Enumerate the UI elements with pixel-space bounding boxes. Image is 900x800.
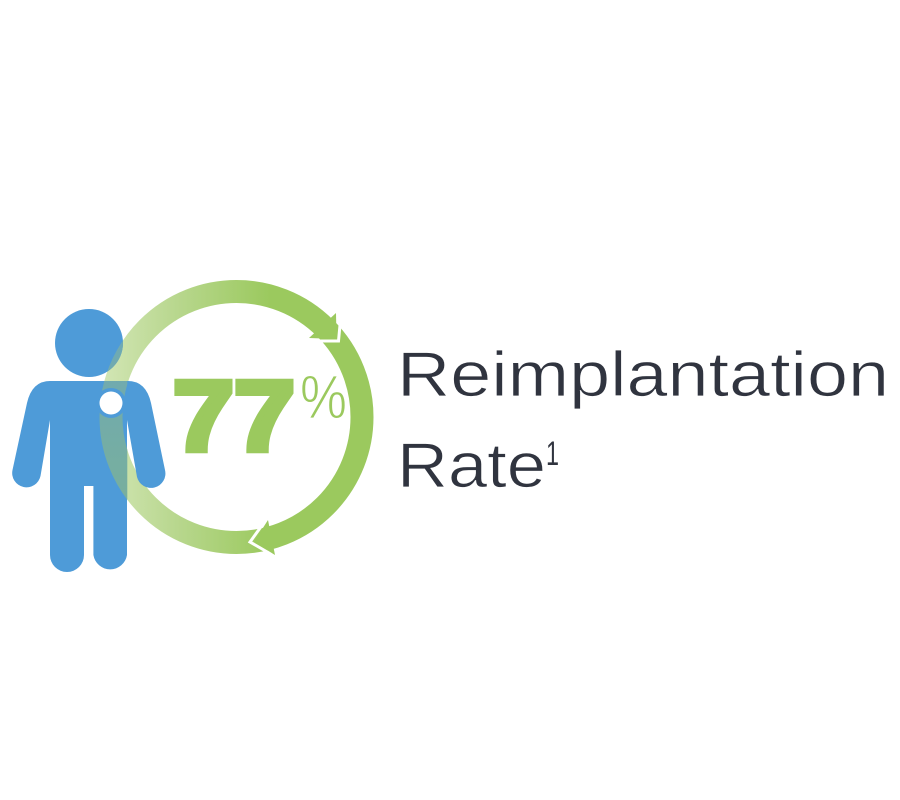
icon: circular arrows [111,292,362,557]
statistic: 77: 77 [173,360,295,471]
icon: person [12,309,166,572]
infographic [12,280,884,572]
percent sign: % [300,363,347,431]
label: Reimplantation: Reimplantation [397,340,889,410]
label: Rate: Rate [397,431,546,501]
footnote marker: 1 [546,435,559,473]
